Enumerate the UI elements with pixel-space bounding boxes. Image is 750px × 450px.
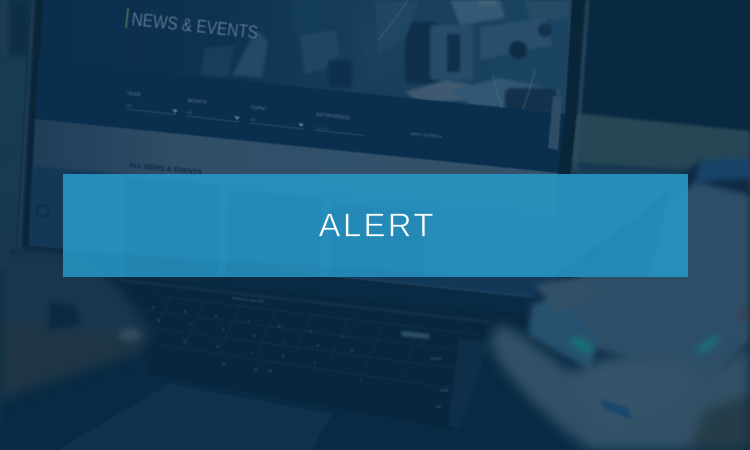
screen subheading: ALL NEWS & EVENTS bbox=[128, 162, 202, 177]
keyboard legends: 4 bbox=[152, 305, 155, 310]
keyboard legends: H bbox=[216, 344, 219, 349]
screen filter labels: All bbox=[126, 103, 131, 108]
keyboard legends: U bbox=[253, 333, 256, 338]
screen filter labels: APPLY FILTERS ▸ bbox=[410, 132, 442, 139]
keyboard legends: . bbox=[325, 376, 326, 381]
hero photo on screen bbox=[40, 0, 572, 114]
screen filter labels: YEAR bbox=[126, 91, 141, 98]
laptop base and keyboard deck bbox=[0, 250, 560, 450]
keyboard legends: G bbox=[183, 339, 187, 344]
screen filter labels: TOPIC bbox=[250, 105, 267, 113]
keyboard legends: 7 bbox=[247, 319, 250, 324]
alert heading: ALERT bbox=[318, 206, 434, 244]
keyboard legends: 5 bbox=[184, 309, 187, 314]
keyboard legends: 9 bbox=[309, 329, 312, 334]
keyboard bbox=[120, 282, 487, 430]
keyboard legends: N bbox=[222, 361, 225, 366]
screen filter labels bbox=[126, 91, 442, 139]
banner ghost cards showing through bbox=[63, 178, 670, 277]
left hand detail bbox=[48, 302, 141, 342]
alert banner bbox=[63, 174, 688, 277]
keyboard legends: 8 bbox=[278, 324, 281, 329]
laptop lid and bezel bbox=[16, 0, 589, 300]
keyboard legends: / bbox=[360, 377, 362, 382]
trackpad bbox=[60, 385, 330, 450]
keyboard legends: Search or type URL bbox=[232, 296, 265, 304]
keyboard legends: L bbox=[314, 360, 317, 365]
keyboard legends: T bbox=[189, 322, 192, 327]
screen side tab bbox=[548, 96, 562, 150]
screen filter labels: MONTH bbox=[187, 98, 207, 106]
keyboard highlighted key bbox=[401, 331, 430, 339]
screen dropdown arrows bbox=[172, 109, 304, 127]
keyboard legends: P bbox=[351, 348, 354, 353]
keyboard legends: J bbox=[250, 350, 252, 355]
phone and right hand bbox=[490, 158, 750, 450]
screen filter labels: KEYWORD(S) bbox=[316, 112, 350, 121]
keyboard legends bbox=[152, 296, 449, 409]
keyboard legends: M bbox=[254, 367, 258, 372]
keyboard legends: O bbox=[316, 343, 320, 348]
screen heading: news and events: NEWS & EVENTS bbox=[131, 8, 259, 43]
keyboard legends: alt bbox=[268, 368, 274, 374]
filter panel bbox=[35, 60, 565, 172]
screen filter underlines bbox=[126, 109, 364, 136]
light results section bbox=[29, 119, 558, 300]
keyboard legends: , bbox=[289, 370, 290, 375]
screen filter labels: Search bbox=[315, 125, 330, 131]
keyboard legends: return bbox=[430, 356, 442, 361]
keyboard legends: 0 bbox=[342, 334, 345, 339]
keyboard legends: K bbox=[282, 354, 285, 359]
keyboard legends: ; bbox=[349, 365, 350, 370]
keyboard legends: I bbox=[284, 339, 285, 344]
screen seal icon bbox=[37, 205, 49, 217]
keyboard legends: 6 bbox=[215, 314, 218, 319]
screen filter labels: All bbox=[250, 117, 255, 122]
keyboard legends: alt bbox=[436, 404, 442, 409]
laptop screen bbox=[29, 0, 572, 300]
left hand bbox=[0, 249, 150, 402]
keyboard legends: shift bbox=[440, 388, 449, 393]
keyboard legends: R bbox=[157, 318, 161, 323]
keyboard legends: Y bbox=[222, 327, 225, 332]
screen filter labels: All bbox=[187, 110, 192, 115]
